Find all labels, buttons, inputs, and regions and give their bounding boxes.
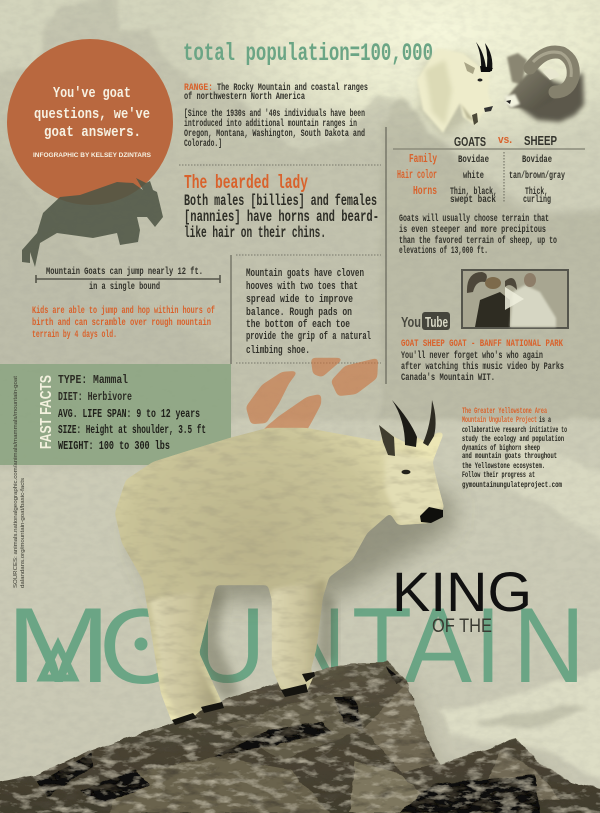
goats vs sheep table: Thick, [525, 186, 548, 198]
mountain wordmark: I [475, 585, 501, 705]
panel: fast facts: WEIGHT: 100 to 300 lbs [58, 439, 170, 453]
bearded lady block: The bearded lady [184, 172, 308, 194]
hooves text block [246, 268, 371, 357]
range text block: Colorado.] [184, 138, 222, 150]
yellowstone project text: the Yellowstone ecosystem. [462, 462, 545, 471]
jump distance caption: Mountain Goats can jump nearly 12 ft. [46, 266, 203, 278]
mountain wordmark: U [190, 585, 266, 705]
orange kids fact: Kids are able to jump and hop within hours of [32, 305, 215, 317]
panel: orange question circle: questions, we've [34, 106, 150, 123]
king of the title: KING [392, 560, 532, 623]
yellowstone project text: gymountainungulateproject.com [462, 481, 562, 490]
yellowstone project text: The Greater Yellowstone Area [462, 407, 547, 416]
rock outcrop [0, 662, 600, 813]
panel: orange question circle: INFOGRAPHIC BY KELSEY DZINTARS [33, 152, 152, 159]
orange kids fact: birth and can scramble over rough mountain [32, 317, 211, 329]
hooves text block: hooves with two toes that [246, 281, 358, 293]
mountain wordmark: M [6, 585, 111, 705]
icon: leaping goat silhouette [22, 178, 163, 267]
goats vs sheep table: Bovidae [458, 154, 489, 166]
goats vs sheep table: SHEEP [524, 133, 557, 148]
video thumbnail [462, 270, 568, 328]
hooves text block: provide the grip of a natural [246, 331, 371, 343]
bearded lady block [184, 172, 379, 242]
youtube logo: Tube [425, 314, 448, 331]
panel: fast facts: DIET: Herbivore [58, 390, 132, 404]
hooves text block: the bottom of each toe [246, 319, 350, 331]
range text block [184, 82, 368, 150]
goats vs sheep table: Thin, black, [450, 186, 497, 198]
goats vs sheep table [393, 133, 585, 206]
range text block: introduced into additional mountain ranges in [184, 118, 357, 130]
bearded lady block: [nannies] have horns and beard- [184, 208, 379, 226]
yellowstone project text: Mountain Ungulate Project [462, 416, 537, 425]
goats vs sheep table: vs. [498, 134, 512, 146]
mountain wordmark [6, 585, 585, 706]
mountain wordmark: N [283, 585, 345, 705]
youtube logo [401, 312, 450, 331]
goats vs sheep table: Family [409, 153, 437, 166]
yellowstone project text: is a [539, 416, 551, 425]
main mountain goat photo [115, 400, 455, 725]
sources: dalandans.org/mountain-goat/basic-facts [20, 478, 26, 588]
king of the title: OF THE [432, 616, 492, 637]
youtube logo: You [401, 314, 421, 331]
goats vs sheep table: curling [523, 194, 551, 206]
panel: fast facts: FAST FACTS [38, 375, 55, 449]
icon: goat head [417, 42, 493, 138]
icon: orange hoof prints [246, 358, 378, 442]
orange kids fact: terrain by 4 days old. [32, 329, 117, 341]
goats vs sheep table: GOATS [454, 134, 486, 149]
panel: fast facts: SIZE: Height at shoulder, 3.5 ft [58, 423, 206, 437]
icon: bighorn sheep head [505, 52, 584, 122]
sources [13, 376, 26, 588]
goats terrain text: elevations of 13,000 ft. [399, 245, 488, 257]
sources: SOURCES: animals.nationalgeographic.com/animals/mammals/mountain-goat [13, 376, 19, 588]
yellowstone project text [462, 407, 567, 490]
range text block: of northwestern North America [184, 91, 305, 103]
range text block: The Rocky Mountain and coastal ranges [217, 82, 368, 94]
mountain wordmark: N [513, 585, 585, 705]
jump distance caption [36, 266, 220, 293]
goats terrain text [399, 213, 557, 257]
goats vs sheep table: Bovidae [522, 154, 552, 166]
mountain wordmark: A [404, 585, 473, 705]
goats vs sheep table: swept back [450, 194, 496, 206]
yellowstone project text: and mountain goats throughout [462, 452, 557, 461]
panel: fast facts: AVG. LIFE SPAN: 9 to 12 years [58, 407, 200, 421]
range text block: Oregon, Montana, Washington, South Dakota and [184, 128, 365, 140]
yellowstone project text: dynamics of bighorn sheep [462, 444, 540, 453]
bearded lady block: like hair on their chins. [184, 224, 326, 242]
orange kids fact [32, 305, 215, 341]
panel: fast facts [0, 364, 231, 465]
goats vs sheep table: Hair color [397, 169, 437, 182]
panel: orange question circle: goat answers. [44, 124, 141, 141]
video description [401, 338, 564, 384]
total population heading: total population=100,000 [183, 39, 433, 68]
video description: Canada's Mountain WIT. [401, 372, 495, 384]
goats vs sheep table: Horns [413, 185, 437, 198]
range text block: RANGE: [184, 83, 213, 94]
range text block: [Since the 1930s and '40s individuals have been [184, 108, 365, 120]
panel: fast facts: TYPE: Mammal [58, 373, 128, 387]
mountain wordmark: O [99, 586, 187, 706]
hooves text block: climbing shoe. [246, 345, 310, 357]
hooves text block: spread wide to improve [246, 294, 353, 306]
bearded lady block: Both males [billies] and females [184, 192, 377, 210]
hooves text block: balance. Rough pads on [246, 307, 352, 319]
panel: orange question circle [7, 39, 173, 205]
panel: orange question circle: You've goat [53, 85, 131, 102]
goats vs sheep table: tan/brown/gray [509, 170, 565, 182]
yellowstone project text: Follow their progress at [462, 471, 535, 480]
hooves text block: Mountain goats have cloven [246, 268, 364, 280]
mountain wordmark: T [352, 585, 412, 705]
jump distance caption: in a single bound [89, 281, 160, 293]
goats vs sheep table: white [463, 170, 484, 182]
